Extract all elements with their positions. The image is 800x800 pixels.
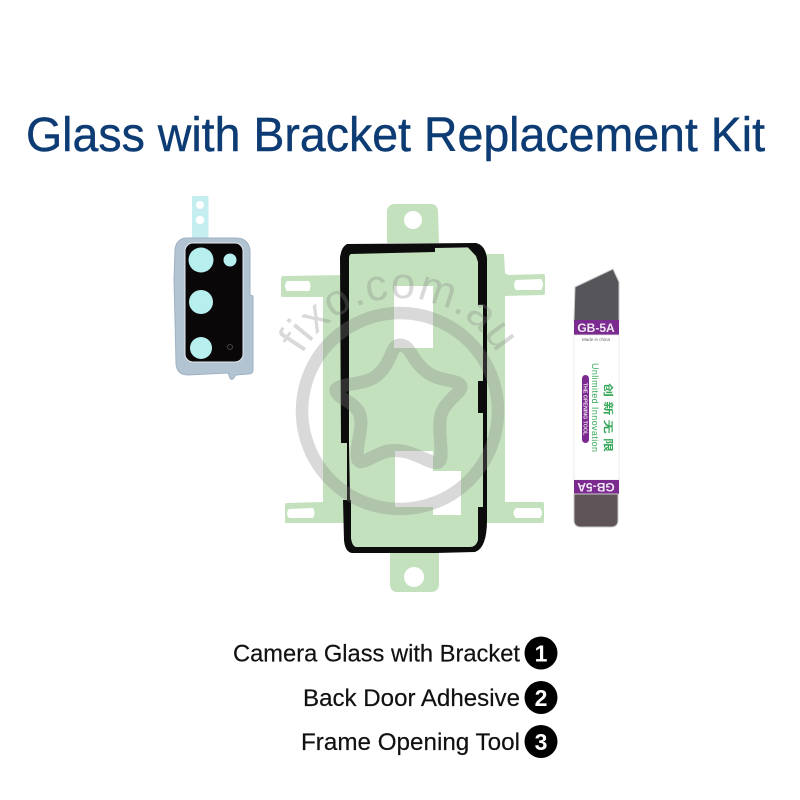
watermark star	[336, 345, 461, 463]
adhesive tab	[192, 196, 208, 238]
band text bottom: GB-5A	[577, 480, 615, 494]
item 1: 1	[535, 640, 548, 666]
watermark logo	[279, 274, 514, 516]
black glass	[185, 243, 243, 362]
watermark text: fixo.com.au	[279, 274, 514, 352]
made in china: Made in china	[582, 337, 610, 342]
item 1: Camera Glass with Bracket	[233, 640, 520, 668]
small sensor mark	[228, 344, 232, 350]
white cut-out: lower	[395, 451, 461, 515]
title: Glass with Bracket Replacement Kit	[26, 109, 765, 162]
band text top: GB-5A	[577, 321, 615, 335]
parts list	[233, 636, 558, 758]
white cut-out: upper	[394, 286, 433, 348]
green english text: Unlimited Innovation	[590, 363, 600, 452]
white body	[574, 335, 619, 480]
purple band bottom	[574, 480, 619, 494]
green chinese text: 创新无限	[602, 383, 614, 452]
black adhesive frame	[340, 243, 487, 553]
metal bracket	[174, 238, 253, 379]
watermark ring	[302, 313, 498, 509]
metal blade bottom	[574, 494, 618, 527]
item 3	[301, 725, 558, 758]
item 2: Back Door Adhesive	[303, 685, 520, 712]
icon: frame opening tool	[574, 269, 619, 527]
pill text: THE OPENING TOOL	[582, 383, 588, 436]
item 2	[303, 681, 558, 714]
item 3: Frame Opening Tool	[301, 729, 520, 756]
metal blade top	[574, 269, 619, 321]
item 3: 3	[535, 729, 547, 755]
icon: back door adhesive	[281, 204, 545, 592]
purple pill	[582, 375, 589, 443]
green liner sheet	[281, 204, 545, 592]
purple band top	[574, 320, 619, 335]
item 2: 2	[535, 685, 547, 711]
icon: camera glass with bracket	[174, 196, 253, 379]
camera lens openings	[188, 248, 236, 359]
